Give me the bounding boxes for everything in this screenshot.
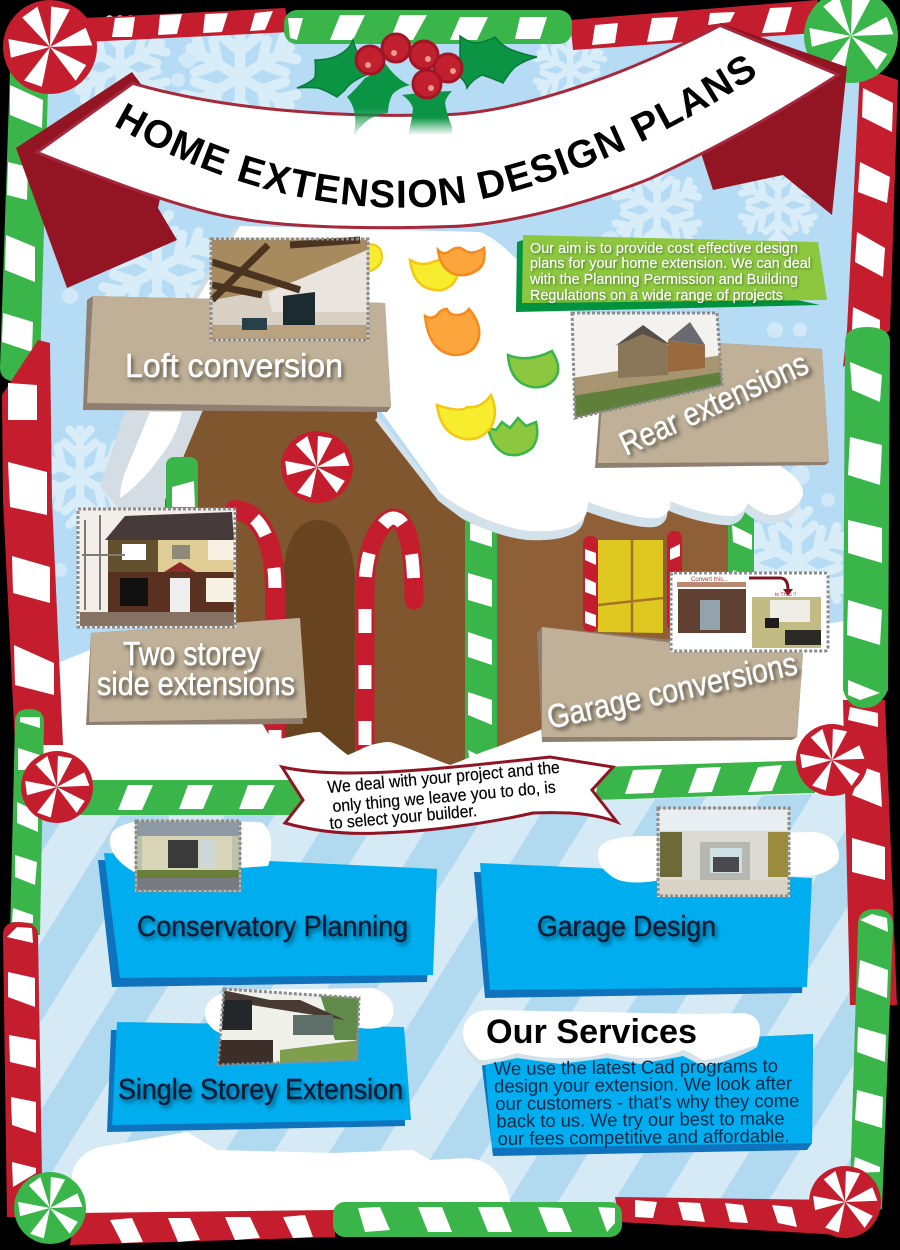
cane: right red middle — [843, 700, 897, 1005]
photo: garage before and after — [670, 572, 829, 652]
cane: bottom green — [333, 1202, 622, 1237]
window — [583, 531, 682, 633]
photo: loft interior — [210, 238, 369, 341]
banner ribbon — [40, 27, 835, 226]
candy: green lower — [488, 418, 537, 455]
cane: right green middle — [843, 327, 890, 708]
label: Garage conversions — [544, 645, 800, 736]
panel: two storey side extensions — [77, 508, 307, 725]
label: Two storey — [123, 635, 261, 672]
candy: orange top — [438, 248, 484, 275]
panel: our services — [463, 1010, 813, 1156]
title text: HOME EXTENSION DESIGN PLANS — [115, 56, 755, 208]
peppermint: middle right — [796, 724, 868, 796]
candy: partial yellow — [368, 244, 382, 272]
right wall — [460, 490, 732, 755]
title banner — [16, 23, 847, 288]
roof snow wedge — [120, 412, 182, 498]
candy: green — [508, 351, 558, 387]
gingerbread house — [100, 226, 803, 770]
label: Loft conversion — [125, 347, 343, 384]
house peppermint — [281, 431, 353, 503]
panel: garage design — [474, 807, 839, 998]
snowflakes and dots — [31, 19, 851, 615]
panel: single storey extension — [107, 988, 411, 1132]
roof snow — [197, 226, 803, 531]
aim text: plans for your home extension. We can deal — [530, 255, 811, 272]
striped lower background — [25, 785, 872, 1225]
ribbon text: only thing we leave you to do, is — [332, 778, 556, 816]
right corner post — [728, 510, 754, 600]
photo: rear extension house — [572, 313, 722, 420]
cane: middle green left — [80, 780, 310, 815]
candy: yellow — [410, 258, 458, 290]
services body text — [494, 1055, 800, 1149]
house post with cap — [166, 457, 198, 527]
cane: middle green right — [595, 760, 815, 800]
label: Single Storey Extension — [118, 1074, 403, 1106]
front wall snow edge — [377, 418, 441, 500]
label: Rear extensions — [614, 345, 814, 462]
title curve guide — [113, 66, 772, 208]
services body text: our customers - that's why they come — [495, 1090, 799, 1114]
cane: top red left — [85, 8, 290, 42]
cane: left red lower — [3, 922, 42, 1217]
snowy ground — [40, 620, 850, 815]
label: side extensions — [97, 665, 295, 702]
services body text: design your extension. We look after — [494, 1072, 792, 1096]
roof snow shadow left — [100, 228, 260, 510]
panel: rear extensions — [572, 313, 829, 468]
ribbon text — [327, 758, 560, 833]
label: Conservatory Planning — [137, 911, 408, 943]
photo: single storey extension — [218, 989, 360, 1065]
right candy cane — [365, 518, 414, 745]
snow cap — [110, 820, 271, 875]
services body text: our fees competitive and affordable. — [498, 1125, 790, 1149]
holly berries — [356, 34, 462, 98]
snow cap — [463, 1010, 760, 1066]
label — [97, 635, 295, 702]
candy: orange — [425, 309, 479, 355]
cane: right red upper — [843, 67, 898, 367]
snow cap — [205, 988, 394, 1034]
left candy cane — [235, 510, 275, 750]
peppermint: bottom left — [14, 1172, 86, 1244]
photo: garage — [657, 807, 790, 897]
peppermint: bottom right — [809, 1166, 881, 1238]
candy: yellow lower — [437, 395, 495, 439]
photo: conservatory — [135, 820, 241, 892]
holly leaves — [297, 36, 537, 97]
photo: garage before and after: Convert this... — [691, 577, 728, 583]
cane: left green lower — [10, 709, 44, 935]
aim text box — [516, 235, 827, 312]
bottom snow drift — [72, 1132, 510, 1220]
cane: bottom red right — [615, 1197, 840, 1235]
sky background — [25, 20, 875, 800]
aim text: Our aim is to provide cost effective design — [530, 240, 798, 257]
cane: top red right — [570, 0, 830, 50]
front wall — [165, 405, 465, 770]
aim text — [529, 240, 811, 304]
cane: top green — [284, 10, 572, 44]
ribbon callout — [282, 757, 617, 833]
middle corner post — [463, 505, 497, 765]
peppermint: top left — [3, 0, 97, 94]
panel: garage conversions — [537, 572, 829, 742]
services body text: back to us. We try our best to make — [496, 1107, 785, 1131]
ribbon text: to select your builder. — [329, 801, 478, 833]
banner left tail — [16, 72, 177, 288]
cane: bottom red left — [70, 1210, 335, 1245]
peppermint: middle left — [21, 751, 93, 823]
holly decoration — [297, 34, 537, 138]
snow cap — [598, 832, 839, 883]
panel: conservatory planning — [98, 820, 437, 987]
banner right tail — [700, 23, 847, 215]
roof candies — [368, 244, 558, 455]
roof snow shadow right — [437, 477, 800, 540]
cane: left red upper — [2, 340, 63, 745]
panel: loft conversion — [83, 238, 391, 412]
peppermint: top right — [804, 0, 898, 83]
label: Garage Design — [537, 911, 716, 943]
heading: Our Services — [486, 1013, 697, 1051]
ribbon text: We deal with your project and the — [327, 758, 560, 797]
photo: garage before and after: to THIS !! — [775, 592, 796, 598]
door arch — [283, 520, 355, 770]
photo: house under construction — [77, 508, 236, 628]
cane: right green lower — [850, 909, 893, 1210]
cane: left green upper — [0, 70, 48, 382]
services body text: We use the latest Cad programs to — [494, 1055, 778, 1079]
aim text: with the Planning Permission and Building — [529, 271, 798, 288]
aim text: Regulations on a wide range of projects — [530, 287, 783, 304]
